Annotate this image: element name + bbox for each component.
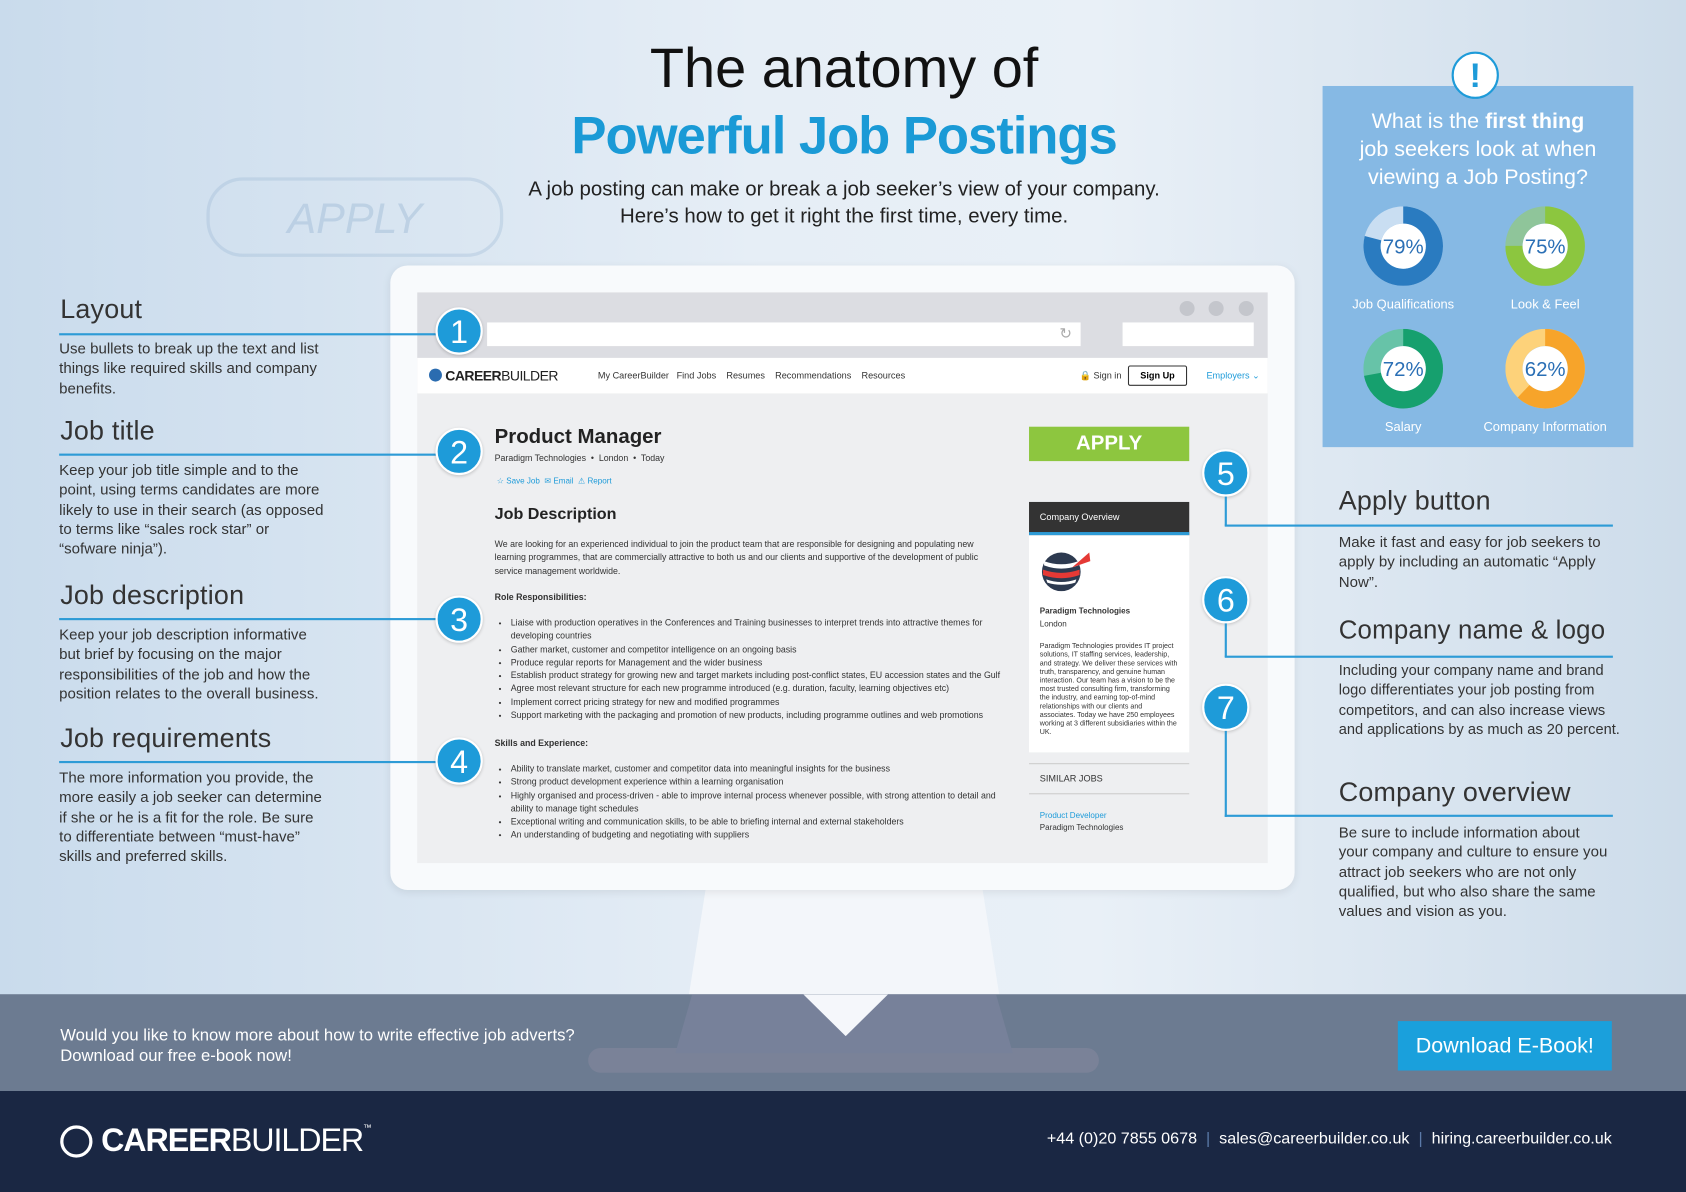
marker 4: 4 xyxy=(450,745,468,780)
donut: look & feel xyxy=(1505,206,1585,312)
apply button xyxy=(1029,427,1189,461)
connector 5 xyxy=(1224,496,1613,527)
stats panel: What is the first thing xyxy=(1372,110,1584,133)
callout: company name & logo: Including your company name and brand logo differentiates your job posting from competitors, and can also increase views and applications by as much as 20 percent. xyxy=(1339,662,1620,737)
callout: layout xyxy=(59,295,436,396)
callout: company overview xyxy=(1338,777,1607,919)
donut: job qualifications: 79% xyxy=(1383,237,1424,259)
callout: job description: Job description xyxy=(60,580,244,611)
donut: company information: Company Information xyxy=(1483,419,1607,434)
marker 2 xyxy=(435,428,483,475)
callout: apply button: Apply button xyxy=(1339,486,1491,516)
callout: job title: Job title xyxy=(60,416,155,446)
apply button: APPLY xyxy=(1076,432,1142,455)
cta text: Would you like to know more about how to write effective job adverts? xyxy=(60,1026,575,1045)
stats panel xyxy=(1323,86,1633,447)
nav bar: Employers ⌄ xyxy=(1206,370,1260,380)
marker 3: 3 xyxy=(450,603,468,638)
marker 1: 1 xyxy=(450,315,468,350)
stats panel: viewing a Job Posting? xyxy=(1368,166,1588,189)
footer logo xyxy=(60,1123,372,1159)
bottom band xyxy=(0,994,1686,1091)
nav bar: Sign Up xyxy=(1140,370,1175,380)
monitor xyxy=(390,265,1295,890)
screen: ☆ Save Job ✉ Email ⚠ Report xyxy=(497,476,612,486)
footer logo: BUILDER xyxy=(231,1123,363,1159)
company overview card xyxy=(1029,502,1190,752)
company overview card: Paradigm Technologies xyxy=(1040,606,1130,616)
callout: apply button xyxy=(1338,486,1601,590)
callout: company name & logo: Company name & logo xyxy=(1339,616,1605,645)
screen: We are looking for an experienced individual to join the product team that are responsible for designing and populating new learning programmes, that are commercially attractive to both us and our clients and supportive of the development of public service management worldwide. xyxy=(495,540,978,576)
donut: job qualifications: Job Qualifications xyxy=(1352,297,1454,312)
screen: Agree most relevant structure for each new programme introduced (e.g. duration, faculty, learning objectives etc) xyxy=(511,684,949,694)
company overview card: Paradigm Technologies provides IT project solutions, IT staffing services, leadership, and strategy. We deliver these services with truth, transparency, and genuine human interaction. Our team has a vision to be the most trusted consulting firm, transforming the industry, and earning top-of-mind relationships with our clients and associates. Today we have 250 employees working at 3 different subsidiaries within the UK. xyxy=(1040,643,1177,736)
screen: Support marketing with the packaging and promotion of new products, including programme outlines and web promotions xyxy=(511,711,983,720)
callout: layout: Use bullets to break up the text and list things like required skills and company benefits. xyxy=(59,340,319,396)
donut: look & feel: Look & Feel xyxy=(1511,297,1580,312)
company overview card: London xyxy=(1040,619,1067,629)
footer xyxy=(0,1091,1686,1192)
icon: exclamation: ! xyxy=(1470,56,1481,95)
screen: Paradigm Technologies xyxy=(1040,822,1123,832)
callout: job description xyxy=(59,580,436,702)
screen: Gather market, customer and competitor intelligence on an ongoing basis xyxy=(511,644,797,654)
job title: Product Manager xyxy=(495,426,662,448)
browser bar: ↻ xyxy=(1059,325,1072,342)
callout: layout: Layout xyxy=(60,295,142,325)
donut: company information xyxy=(1483,328,1607,434)
job description: Job Description xyxy=(495,505,617,523)
notch xyxy=(803,994,888,1036)
marker 6 xyxy=(1202,576,1249,623)
screen: Product Developer xyxy=(1040,810,1107,820)
screen: An understanding of budgeting and negotiating with suppliers xyxy=(511,830,749,840)
screen: Liaise with production operatives in the Conferences and Training businesses to interpret trends into attractive themes for developing countries xyxy=(511,618,983,641)
screen: Skills and Experience: xyxy=(495,738,588,748)
callout: company overview: Company overview xyxy=(1339,777,1571,807)
connector 6 xyxy=(1224,623,1613,658)
icon: exclamation xyxy=(1452,52,1499,99)
background sketch: apply button xyxy=(206,177,503,257)
screen: Establish product strategy for growing new and target markets including post-conflict states, EU accession states and the Gulf xyxy=(511,671,1000,681)
subtitle xyxy=(528,178,1160,228)
donut: look & feel: 75% xyxy=(1525,237,1566,259)
nav bar xyxy=(417,358,1268,393)
nav bar: My CareerBuilder Find Jobs Resumes Recommendations Resources xyxy=(598,370,905,380)
cta text: Download our free e-book now! xyxy=(60,1047,292,1065)
marker 5: 5 xyxy=(1217,457,1235,492)
marker 7: 7 xyxy=(1217,691,1235,727)
marker 7 xyxy=(1202,684,1249,731)
screen: Role Responsibilities: xyxy=(495,592,587,602)
similar jobs xyxy=(1029,763,1189,794)
monitor stand xyxy=(689,890,999,994)
subtitle: A job posting can make or break a job seeker’s view of your company. xyxy=(528,178,1160,201)
stats panel: job seekers look at when xyxy=(1360,138,1596,161)
contact: +44 (0)20 7855 0678 | sales@careerbuilder.co.uk | hiring.careerbuilder.co.uk xyxy=(1047,1130,1612,1148)
title: Powerful Job Postings xyxy=(571,107,1117,166)
screen xyxy=(417,292,1268,863)
marker 2: 2 xyxy=(450,435,468,471)
marker 1 xyxy=(435,307,483,355)
title: The anatomy of xyxy=(650,38,1038,100)
donut: company information: 62% xyxy=(1525,359,1566,381)
title xyxy=(571,38,1117,166)
marker 3 xyxy=(435,595,483,643)
cta text xyxy=(60,1026,575,1065)
company logo xyxy=(1042,552,1090,592)
background sketch: apply button: APPLY xyxy=(287,196,422,243)
connector 7 xyxy=(1224,730,1613,817)
screen: Ability to translate market, customer and competitor data into meaningful insights for the business xyxy=(511,764,890,774)
callout: job title: Keep your job title simple and to the point, using terms candidates are more likely to use in their search (as opposed to terms like “sales rock star” or “sofware ninja”). xyxy=(59,461,324,557)
donut: salary: 72% xyxy=(1383,359,1424,381)
footer logo: ™ xyxy=(363,1123,372,1133)
callout: company overview: Be sure to include information about your company and culture to ensure you attract job seekers who are not only qualified, but who also share the same values and vision as you. xyxy=(1339,823,1607,919)
callout: job requirements: Job requirements xyxy=(60,723,271,753)
donut: job qualifications xyxy=(1352,206,1454,312)
screen: Implement correct pricing strategy for new and modified programmes xyxy=(511,697,779,707)
similar jobs: SIMILAR JOBS xyxy=(1040,773,1103,784)
company overview card: Company Overview xyxy=(1040,512,1120,522)
download button: Download E-Book! xyxy=(1416,1034,1594,1058)
callout: job title xyxy=(59,416,436,557)
callout: apply button: Make it fast and easy for job seekers to apply by including an automatic “Apply Now”. xyxy=(1339,533,1601,590)
stand base xyxy=(588,1048,1099,1073)
download button xyxy=(1398,1021,1612,1071)
nav bar: 🔒 Sign in xyxy=(1080,370,1121,380)
screen: Produce regular reports for Management and the wider business xyxy=(511,658,762,667)
screen: Exceptional writing and communication skills, to be able to briefing internal and external stakeholders xyxy=(511,817,904,827)
screen: Strong product development experience within a learning organisation xyxy=(511,777,783,787)
marker 5 xyxy=(1202,449,1249,497)
marker 4 xyxy=(435,737,483,785)
screen: Highly organised and process-driven - able to improve internal process whenever possible, with strong attention to detail and ability to manage tight schedules xyxy=(511,791,996,814)
browser bar xyxy=(417,292,1268,358)
marker 6: 6 xyxy=(1217,584,1235,619)
callout: job requirements xyxy=(59,723,436,864)
donut: salary: Salary xyxy=(1385,419,1421,434)
donut: salary xyxy=(1364,328,1443,434)
subtitle: Here’s how to get it right the first time, every time. xyxy=(620,205,1068,228)
callout: company name & logo xyxy=(1339,616,1620,737)
nav bar: CAREERBUILDER xyxy=(445,368,558,384)
footer logo: CAREER xyxy=(101,1123,231,1159)
callout: job description: Keep your job description informative but brief by focusing on the major responsibilities of the job and how the position relates to the overall business. xyxy=(59,626,319,702)
screen: Paradigm Technologies • London • Today xyxy=(495,454,664,463)
callout: job requirements: The more information you provide, the more easily a job seeker can determine if she or he is a fit for the role. Be sure to differentiate between “must-have” skills and preferred skills. xyxy=(59,769,322,864)
